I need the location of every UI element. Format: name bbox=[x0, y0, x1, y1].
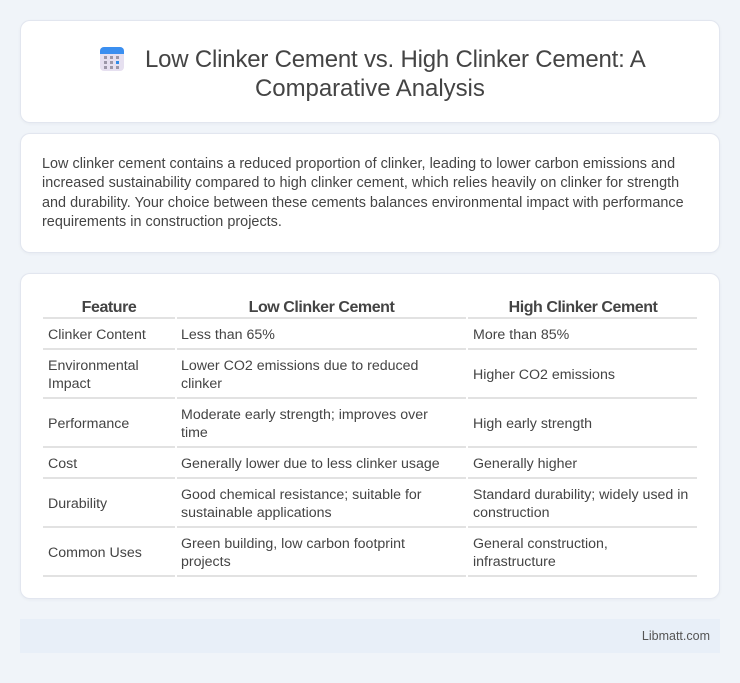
row: environmental impact: Lower CO2 emissions due to reduced bbox=[181, 358, 418, 374]
row: durability: Durability bbox=[48, 496, 107, 512]
row: common uses: Green building, low carbon footprint bbox=[181, 536, 405, 552]
table header row: High Clinker Cement bbox=[509, 299, 657, 316]
row: common uses: Common Uses bbox=[48, 545, 142, 561]
row: durability: construction bbox=[473, 505, 550, 521]
table header row: Low Clinker Cement bbox=[249, 299, 394, 316]
header panel bbox=[20, 20, 720, 123]
intro paragraph: Low clinker cement contains a reduced proportion of clinker, leading to lower carbon emissions and bbox=[42, 156, 675, 172]
row: environmental impact: Environmental bbox=[48, 358, 139, 374]
table header row: Feature bbox=[82, 299, 136, 316]
row: cost bbox=[48, 456, 577, 472]
comparison table panel bbox=[20, 273, 720, 599]
row: common uses: General construction, bbox=[473, 536, 608, 552]
row: clinker content: Less than 65% bbox=[181, 327, 275, 343]
intro paragraph: requirements in construction projects. bbox=[42, 214, 282, 230]
row: common uses: projects bbox=[181, 554, 231, 570]
row: performance: Moderate early strength; improves over bbox=[181, 407, 428, 423]
row: durability bbox=[48, 487, 688, 521]
row: performance: High early strength bbox=[473, 416, 592, 432]
row: durability: sustainable applications bbox=[181, 505, 332, 521]
footer bar bbox=[20, 619, 720, 653]
row: performance bbox=[48, 407, 592, 441]
table header row bbox=[82, 299, 658, 316]
row: cost: Generally higher bbox=[473, 456, 577, 472]
icon: calendar grid bbox=[100, 47, 124, 71]
row: environmental impact: clinker bbox=[181, 376, 222, 392]
intro text panel bbox=[20, 133, 720, 253]
row: environmental impact: Impact bbox=[48, 376, 91, 392]
row: cost: Generally lower due to less clinker usage bbox=[181, 456, 440, 472]
row: durability: Good chemical resistance; suitable for bbox=[181, 487, 422, 503]
row: clinker content bbox=[48, 327, 569, 343]
row: performance: Performance bbox=[48, 416, 129, 432]
footer credit: Libmatt.com bbox=[642, 629, 710, 643]
row: cost: Cost bbox=[48, 456, 77, 472]
row: environmental impact: Higher CO2 emissions bbox=[473, 367, 615, 383]
title: Low Clinker Cement vs. High Clinker Cement: A bbox=[145, 46, 646, 73]
intro paragraph: increased sustainability compared to high clinker cement, which relies heavily on clinker for strength bbox=[42, 175, 679, 191]
row: durability: Standard durability; widely used in bbox=[473, 487, 688, 503]
intro paragraph bbox=[42, 156, 684, 230]
row: performance: time bbox=[181, 425, 208, 441]
row: clinker content: Clinker Content bbox=[48, 327, 146, 343]
row: common uses: infrastructure bbox=[473, 554, 556, 570]
row: environmental impact bbox=[48, 358, 615, 392]
intro paragraph: and durability. Your choice between these cements balances environmental impact with performance bbox=[42, 195, 684, 211]
row: clinker content: More than 85% bbox=[473, 327, 569, 343]
row: common uses bbox=[48, 536, 608, 570]
title: Comparative Analysis bbox=[255, 75, 485, 102]
title bbox=[145, 46, 646, 102]
